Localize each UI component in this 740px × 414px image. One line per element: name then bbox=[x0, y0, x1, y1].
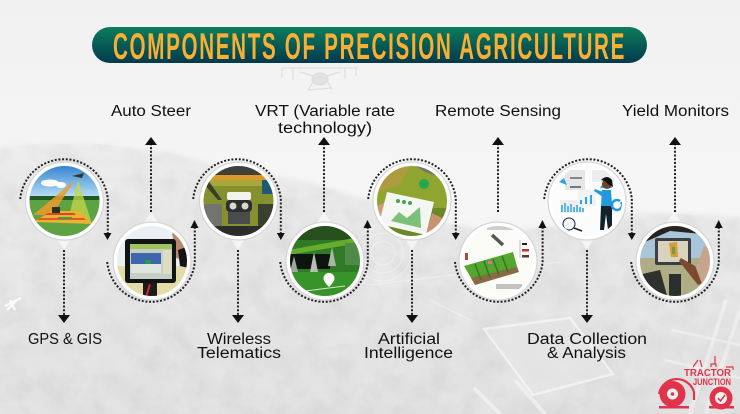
connector down bbox=[586, 250, 588, 315]
connector down bbox=[411, 250, 413, 315]
logo: Tractor Junction: TRACTOR bbox=[684, 368, 732, 379]
step 7: Data Collection & Analysis: & Analysis bbox=[547, 345, 626, 362]
label: Auto Steer bbox=[111, 103, 191, 120]
step 8: Yield Monitors bbox=[622, 103, 729, 302]
photo: tractor monitor bbox=[117, 226, 187, 296]
step 6: Remote Sensing bbox=[435, 103, 561, 302]
logo: Tractor Junction bbox=[659, 356, 734, 410]
step 1: GPS & GIS bbox=[20, 159, 112, 348]
photo: greenhouse tablet bbox=[377, 166, 447, 236]
logo: Tractor Junction: JUNCTION bbox=[693, 377, 731, 387]
drone watermark bbox=[282, 68, 358, 90]
illustration: satellite over crop rows bbox=[464, 226, 529, 289]
connector down bbox=[237, 250, 239, 315]
connector up bbox=[323, 145, 325, 212]
connector down bbox=[63, 250, 65, 315]
wifi watermark icon bbox=[5, 298, 21, 310]
connector up bbox=[150, 145, 152, 212]
photo: GPS field map bbox=[30, 166, 100, 236]
label: Data Collection bbox=[527, 331, 647, 348]
figure: woman bbox=[594, 177, 613, 230]
step 7: Data Collection & Analysis bbox=[527, 159, 647, 362]
tablet watermark bbox=[474, 318, 613, 414]
label: GPS & GIS bbox=[28, 331, 102, 348]
logo tractor outline bbox=[693, 356, 733, 370]
step 3: Wireless Telematics bbox=[193, 159, 285, 362]
label: Remote Sensing bbox=[435, 103, 561, 120]
label: Wireless bbox=[207, 331, 271, 348]
step 3: Wireless Telematics: Telematics bbox=[197, 345, 281, 362]
logo big wheel bbox=[659, 379, 694, 408]
step 4: VRT bbox=[255, 103, 395, 302]
connector up bbox=[497, 145, 499, 212]
step 2: Auto Steer bbox=[107, 103, 198, 302]
photo: field sprayer bbox=[290, 226, 360, 296]
icon: map pin bbox=[324, 273, 334, 287]
background: faded farm field bbox=[0, 144, 740, 414]
logo small wheel bbox=[709, 386, 734, 410]
photo: cab telematics bbox=[204, 166, 274, 236]
step 4: VRT: technology) bbox=[278, 120, 372, 137]
connector up bbox=[674, 145, 676, 212]
photo: yield monitor in cab bbox=[640, 226, 710, 296]
step 5: Artificial Intelligence: Intelligence bbox=[364, 345, 453, 362]
title banner bbox=[92, 26, 647, 67]
label: Yield Monitors bbox=[622, 103, 729, 120]
step 5: Artificial Intelligence bbox=[364, 159, 460, 362]
label: Artificial bbox=[378, 331, 440, 348]
label: VRT (Variable rate bbox=[255, 103, 395, 120]
illustration: analyst with charts bbox=[559, 170, 622, 232]
